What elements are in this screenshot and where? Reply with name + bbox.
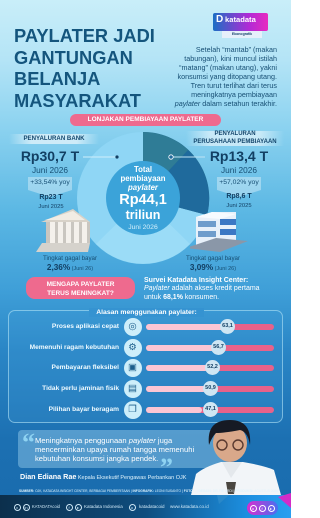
- callout: mengapa paylater: TERUS MENINGKAT?: [47, 290, 114, 296]
- row 2: 56,7: [213, 344, 224, 350]
- quote text: mencerminkan upaya rumah tangga memenuhi: [35, 445, 194, 454]
- icon: close quote: ”: [160, 453, 173, 482]
- donut center text: Juni 2026: [128, 224, 158, 231]
- label perusahaan: PENYALURAN: [214, 131, 256, 137]
- panel: penyaluran perusahaan pembiayaan: [189, 130, 281, 208]
- growth arrow: [217, 177, 261, 197]
- row 4: ▤: [128, 383, 137, 394]
- row 1: 63,1: [222, 323, 233, 329]
- label perusahaan: PERUSAHAAN PEMBIAYAAN: [193, 138, 277, 144]
- title: PAYLATER JADI: [14, 25, 155, 46]
- intro text: tabungan), kini muncul istilah: [184, 54, 277, 63]
- growth arrow: [28, 177, 72, 197]
- icon: bank building: [36, 209, 90, 252]
- website: www.katadata.co.id: [170, 504, 209, 509]
- label bank: [9, 134, 99, 144]
- panel: quote: [18, 430, 230, 468]
- logo: katadata: katadata: [225, 15, 256, 24]
- text: survei: Survei Katadata Insight Center:: [144, 276, 248, 284]
- logo: katadata: Ekonografik: [232, 32, 252, 36]
- row 3: 52,2: [207, 364, 218, 370]
- callout: mengapa paylater: [26, 277, 135, 299]
- logo: katadata: [213, 13, 268, 38]
- social: facebook and youtube: ▸: [77, 504, 79, 510]
- donut center text: paylater: [128, 183, 158, 192]
- source line: SUMBER: OJK, KATADATA INSIGHT CENTER, BERBAGAI PEMBERITAAN | INFOGRAFIK: LEONI SUSANTO | FOTO: - | DESAIN: DELFIE ARDI | PRODUKSI: AGUSTUS 2026: [19, 489, 278, 493]
- intro text: Tren turut terlihat dari terus: [191, 81, 277, 90]
- donut center text: Rp44,1: [119, 192, 167, 208]
- row 5: ❐: [128, 404, 137, 414]
- row 1: ◎: [128, 321, 137, 332]
- donut chart: [77, 132, 210, 264]
- text: survei: Paylater adalah akses kredit pertama: [144, 285, 260, 292]
- panel: penyaluran bank: Juni 2025: [38, 204, 64, 210]
- donut center text: pembiayaan: [120, 174, 166, 183]
- row 4: 50,9: [205, 385, 216, 391]
- logo: katadata: D: [216, 14, 223, 25]
- title: MASYARAKAT: [14, 90, 141, 111]
- text: tingkat gagal bayar perusahaan: [186, 255, 240, 272]
- heading: lonjakan pembiayaan: LONJAKAN PEMBIAYAAN PAYLATER: [88, 116, 203, 123]
- social: facebook and youtube: f: [68, 504, 70, 510]
- intro text: meningkatnya pembiayaan: [191, 90, 277, 99]
- growth arrow: +57,02% yoy: [219, 179, 259, 186]
- social: x and instagram: [14, 504, 60, 511]
- row 2: ⚙: [128, 342, 137, 353]
- donut center text: triliun: [126, 208, 160, 222]
- row 2: Memenuhi ragam kebutuhan: [30, 344, 119, 351]
- row 5: 47,1: [205, 406, 216, 412]
- social: x and instagram: KATADATAcoid: [32, 504, 60, 509]
- footer: [0, 495, 291, 518]
- title: [14, 25, 155, 111]
- intro text: “matang” (makan utang), yakni: [179, 63, 277, 72]
- heading: alasan: Alasan menggunakan paylater:: [96, 309, 197, 316]
- text: survei: [144, 276, 260, 300]
- social badge: [247, 501, 278, 515]
- label bank: PENYALURAN BANK: [23, 135, 85, 142]
- row 1: Proses aplikasi cepat: [52, 323, 119, 330]
- row 3: Pembayaran fleksibel: [52, 364, 119, 371]
- heading: alasan: [89, 308, 204, 317]
- social: instagram: [129, 504, 165, 511]
- row 4: Tidak perlu jaminan fisik: [42, 385, 119, 392]
- row 3: [52, 359, 274, 377]
- panel: penyaluran bank: [12, 134, 96, 210]
- social: x and instagram: in: [24, 504, 28, 510]
- social badge: f: [261, 506, 263, 510]
- text: tingkat gagal bayar bank: Tingkat gagal bayar: [43, 255, 97, 262]
- quote text: Meningkatnya penggunaan paylater juga: [35, 436, 172, 444]
- value bank: Rp30,7 T: [21, 148, 79, 164]
- text: tingkat gagal bayar perusahaan: 3,09% (Juni 26): [190, 263, 236, 272]
- title: GANTUNGAN: [14, 47, 133, 68]
- icon: open quote: “: [22, 428, 35, 457]
- donut center text: [119, 165, 167, 231]
- social: facebook and youtube: [66, 504, 123, 511]
- social: instagram: katadatacoid: [139, 504, 165, 509]
- callout: mengapa paylater: MENGAPA PAYLATER: [47, 280, 114, 288]
- label perusahaan: [186, 131, 284, 146]
- heading: lonjakan pembiayaan: [70, 114, 221, 126]
- title: BELANJA: [14, 68, 100, 89]
- text: tingkat gagal bayar bank: 2,36% (Juni 26): [47, 263, 93, 272]
- intro text: paylater dalam setahun terakhir.: [175, 99, 277, 108]
- social: facebook and youtube: Katadata Indonesia: [84, 504, 123, 509]
- quote text: kebutuhan konsumsi jangka pendek.: [35, 454, 158, 463]
- text: survei: untuk 68,1% konsumen.: [144, 294, 219, 300]
- panel: penyaluran perusahaan pembiayaan: Juni 2025: [226, 202, 252, 208]
- text: tingkat gagal bayar bank: [43, 255, 97, 272]
- bar rows: [30, 318, 274, 419]
- intro text: Setelah “mantab” (makan: [196, 45, 277, 54]
- social badge: ▸: [270, 506, 272, 510]
- panel: alasan menggunakan paylater: [8, 310, 283, 423]
- growth arrow: +33,54% yoy: [30, 179, 70, 186]
- quote text: [35, 436, 194, 463]
- donut center text: Total: [134, 165, 152, 174]
- value perusahaan: Rp13,4 T: [210, 148, 268, 164]
- social: instagram: o: [131, 504, 133, 510]
- social: x and instagram: x: [16, 504, 18, 510]
- icon: office building: [190, 212, 248, 252]
- panel: penyaluran bank: Juni 2026: [32, 165, 68, 175]
- text: tingkat gagal bayar perusahaan: Tingkat gagal bayar: [186, 255, 240, 262]
- row 1: [52, 318, 274, 336]
- previous value: Rp23 T: [39, 194, 63, 201]
- previous value: Rp8,6 T: [226, 193, 252, 200]
- footer tail: [217, 495, 228, 504]
- intro text: konsumsi yang ditopang utang.: [178, 72, 277, 81]
- row 4: [42, 380, 274, 398]
- row 3: ▣: [128, 362, 137, 373]
- photo: person: [191, 420, 281, 495]
- intro text: [174, 45, 277, 108]
- panel: penyaluran perusahaan pembiayaan: Juni 2026: [221, 165, 257, 175]
- row 2: [30, 339, 274, 357]
- row 5: [49, 401, 274, 419]
- social badge: o: [252, 506, 254, 510]
- corner accent: [278, 493, 291, 508]
- row 5: Pilihan bayar beragam: [49, 406, 119, 412]
- text: attribution: Dian Ediana Rae Kepala Eksekutif Pengawas Perbankan OJK: [20, 472, 186, 481]
